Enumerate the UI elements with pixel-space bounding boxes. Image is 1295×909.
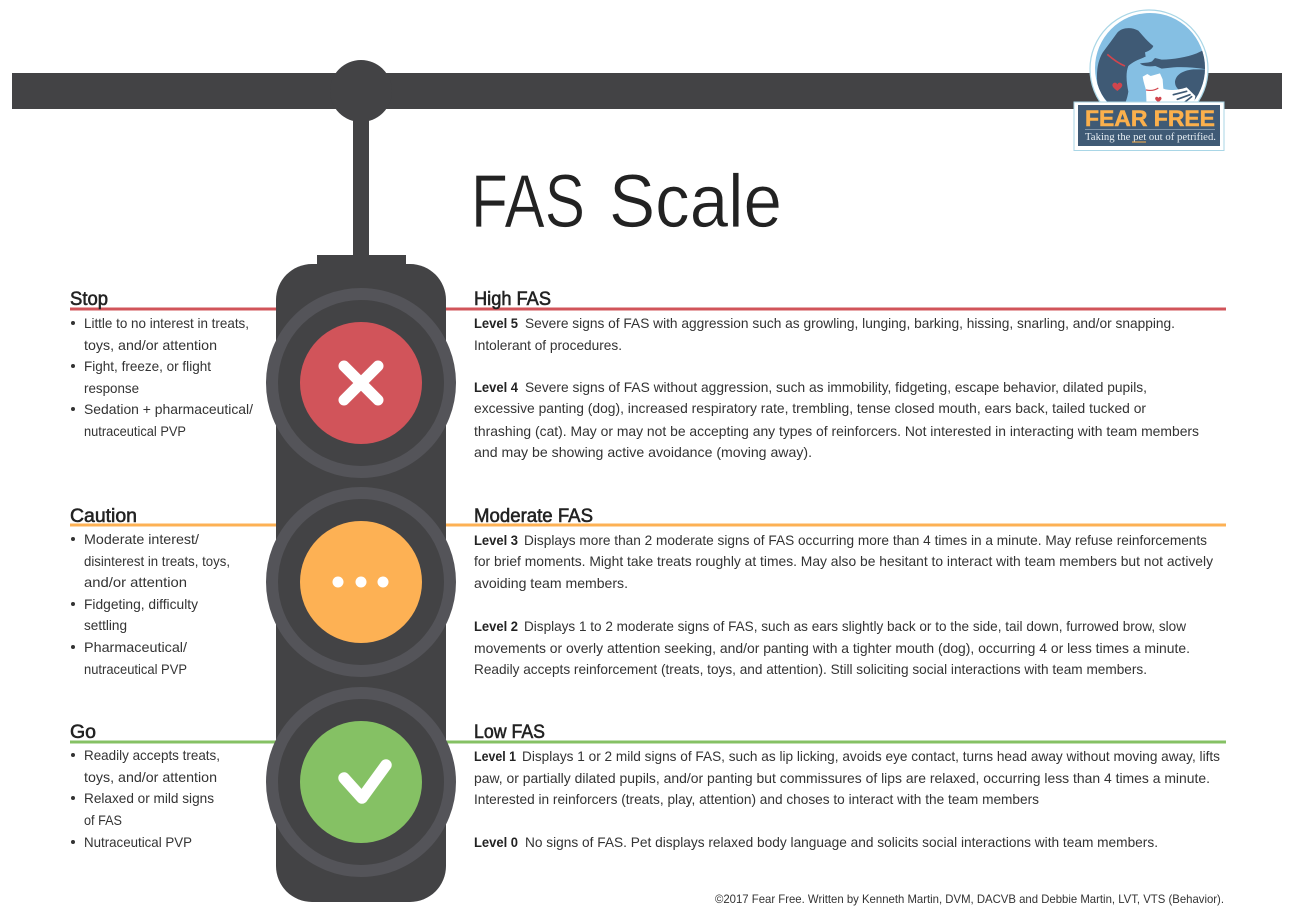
panel: stop list <box>70 289 253 439</box>
level 3 text: for brief moments. Might take treats roughly at times. May also be hesitant to interact with team members but not actively <box>474 553 1213 569</box>
pole joint <box>330 60 392 122</box>
caution light <box>272 493 450 671</box>
level 0 text: Level 0 <box>474 834 518 850</box>
level 2 text: Readily accepts reinforcement (treats, toys, and attention). Still soliciting social interactions with team members. <box>474 661 1147 677</box>
level 5 text: Severe signs of FAS with aggression such as growling, lunging, barking, hissing, snarling, and/or snapping. <box>525 315 1175 331</box>
traffic light <box>272 60 450 902</box>
housing cap <box>317 255 406 267</box>
bullet list: toys, and/or attention <box>84 337 217 353</box>
bullet list: and/or attention <box>84 574 187 590</box>
title <box>471 159 782 243</box>
logo wordmark: FEAR FREE <box>1085 106 1215 131</box>
footer credit: ©2017 Fear Free. Written by Kenneth Martin, DVM, DACVB and Debbie Martin, LVT, VTS (Behavior). <box>715 892 1224 906</box>
level 3 text <box>474 532 1213 591</box>
traffic light horizontal arm <box>12 73 1282 109</box>
level 4 text: thrashing (cat). May or may not be accepting any types of reinforcers. Not interested in interacting with team members <box>474 423 1199 439</box>
level 2 text: Displays 1 to 2 moderate signs of FAS, such as ears slightly back or to the side, tail down, furrowed brow, slow <box>524 618 1187 634</box>
bullet list <box>71 315 253 439</box>
stop light <box>272 294 450 472</box>
logo tagline: Taking the pet out of petrified. <box>1085 132 1216 143</box>
panel: go list <box>70 722 220 850</box>
bullet list: Nutraceutical PVP <box>84 834 192 850</box>
bullet list: Fight, freeze, or flight <box>84 358 211 374</box>
logo: Fear Free <box>1074 10 1224 150</box>
heading: stop: Stop <box>70 289 108 310</box>
level 4 text: Severe signs of FAS without aggression, such as immobility, fidgeting, escape behavior, dilated pupils, <box>525 379 1147 395</box>
panel: caution list <box>70 506 230 677</box>
level 0 text: No signs of FAS. Pet displays relaxed body language and solicits social interactions with team members. <box>525 834 1158 850</box>
panel: low FAS <box>474 722 1220 850</box>
level 3 text: Level 3 <box>474 532 518 548</box>
level 4 text: excessive panting (dog), increased respiratory rate, trembling, tense closed mouth, ears back, tailed tucked or <box>474 400 1146 416</box>
bullet list: Little to no interest in treats, <box>84 315 249 331</box>
bullet list: Fidgeting, difficulty <box>84 596 198 612</box>
title: FAS <box>471 159 585 243</box>
coloured divider lines <box>70 308 1226 744</box>
housing <box>276 264 446 902</box>
level 4 text: Level 4 <box>474 379 518 395</box>
level 5 text <box>474 315 1175 353</box>
level 3 text: avoiding team members. <box>474 575 628 591</box>
title: Scale <box>609 159 782 243</box>
bullet list: toys, and/or attention <box>84 769 217 785</box>
bullet list: of FAS <box>84 812 122 828</box>
bullet list: Sedation + pharmaceutical/ <box>84 401 253 417</box>
bullet list: nutraceutical PVP <box>84 661 187 677</box>
level 2 text: movements or overly attention seeking, and/or panting with a tighter mouth (dog), occurring 4 or less times a minute. <box>474 640 1190 656</box>
bullet list: Readily accepts treats, <box>84 747 220 763</box>
level 5 text: Level 5 <box>474 315 518 331</box>
heading: caution: Caution <box>70 506 137 527</box>
bullet list: nutraceutical PVP <box>84 423 186 439</box>
level 1 text: Level 1 <box>474 748 516 764</box>
heading: low FAS: Low FAS <box>474 722 545 743</box>
bullet list: settling <box>84 617 127 633</box>
bullet list: response <box>84 380 139 396</box>
go light <box>272 693 450 871</box>
heading: go: Go <box>70 722 96 743</box>
bullet list: Moderate interest/ <box>84 531 199 547</box>
level 5 text: Intolerant of procedures. <box>474 337 622 353</box>
level 1 text: paw, or partially dilated pupils, and/or panting but commissures of lips are relaxed, occurring less than 4 times a minute. <box>474 770 1210 786</box>
level 4 text <box>474 379 1199 460</box>
bullet list <box>71 531 230 677</box>
bullet list <box>71 747 220 850</box>
panel: moderate FAS <box>474 506 1213 677</box>
level 4 text: and may be showing active avoidance (moving away). <box>474 444 812 460</box>
heading: moderate FAS: Moderate FAS <box>474 506 593 527</box>
panel: high FAS <box>474 289 1199 460</box>
level 1 text: Interested in reinforcers (treats, play, attention) and choses to interact with the team members <box>474 791 1039 807</box>
bullet list: disinterest in treats, toys, <box>84 553 230 569</box>
level 3 text: Displays more than 2 moderate signs of FAS occurring more than 4 times in a minute. May refuse reinforcements <box>524 532 1207 548</box>
level 2 text: Level 2 <box>474 618 518 634</box>
level 1 text: Displays 1 or 2 mild signs of FAS, such as lip licking, avoids eye contact, turns head away without moving away, lifts <box>522 748 1220 764</box>
heading: high FAS: High FAS <box>474 289 551 310</box>
logo banner <box>1074 102 1224 150</box>
level 1 text <box>474 748 1220 807</box>
pole <box>353 115 369 265</box>
bullet list: Relaxed or mild signs <box>84 790 214 806</box>
bullet list: Pharmaceutical/ <box>84 639 187 655</box>
level 2 text <box>474 618 1190 677</box>
